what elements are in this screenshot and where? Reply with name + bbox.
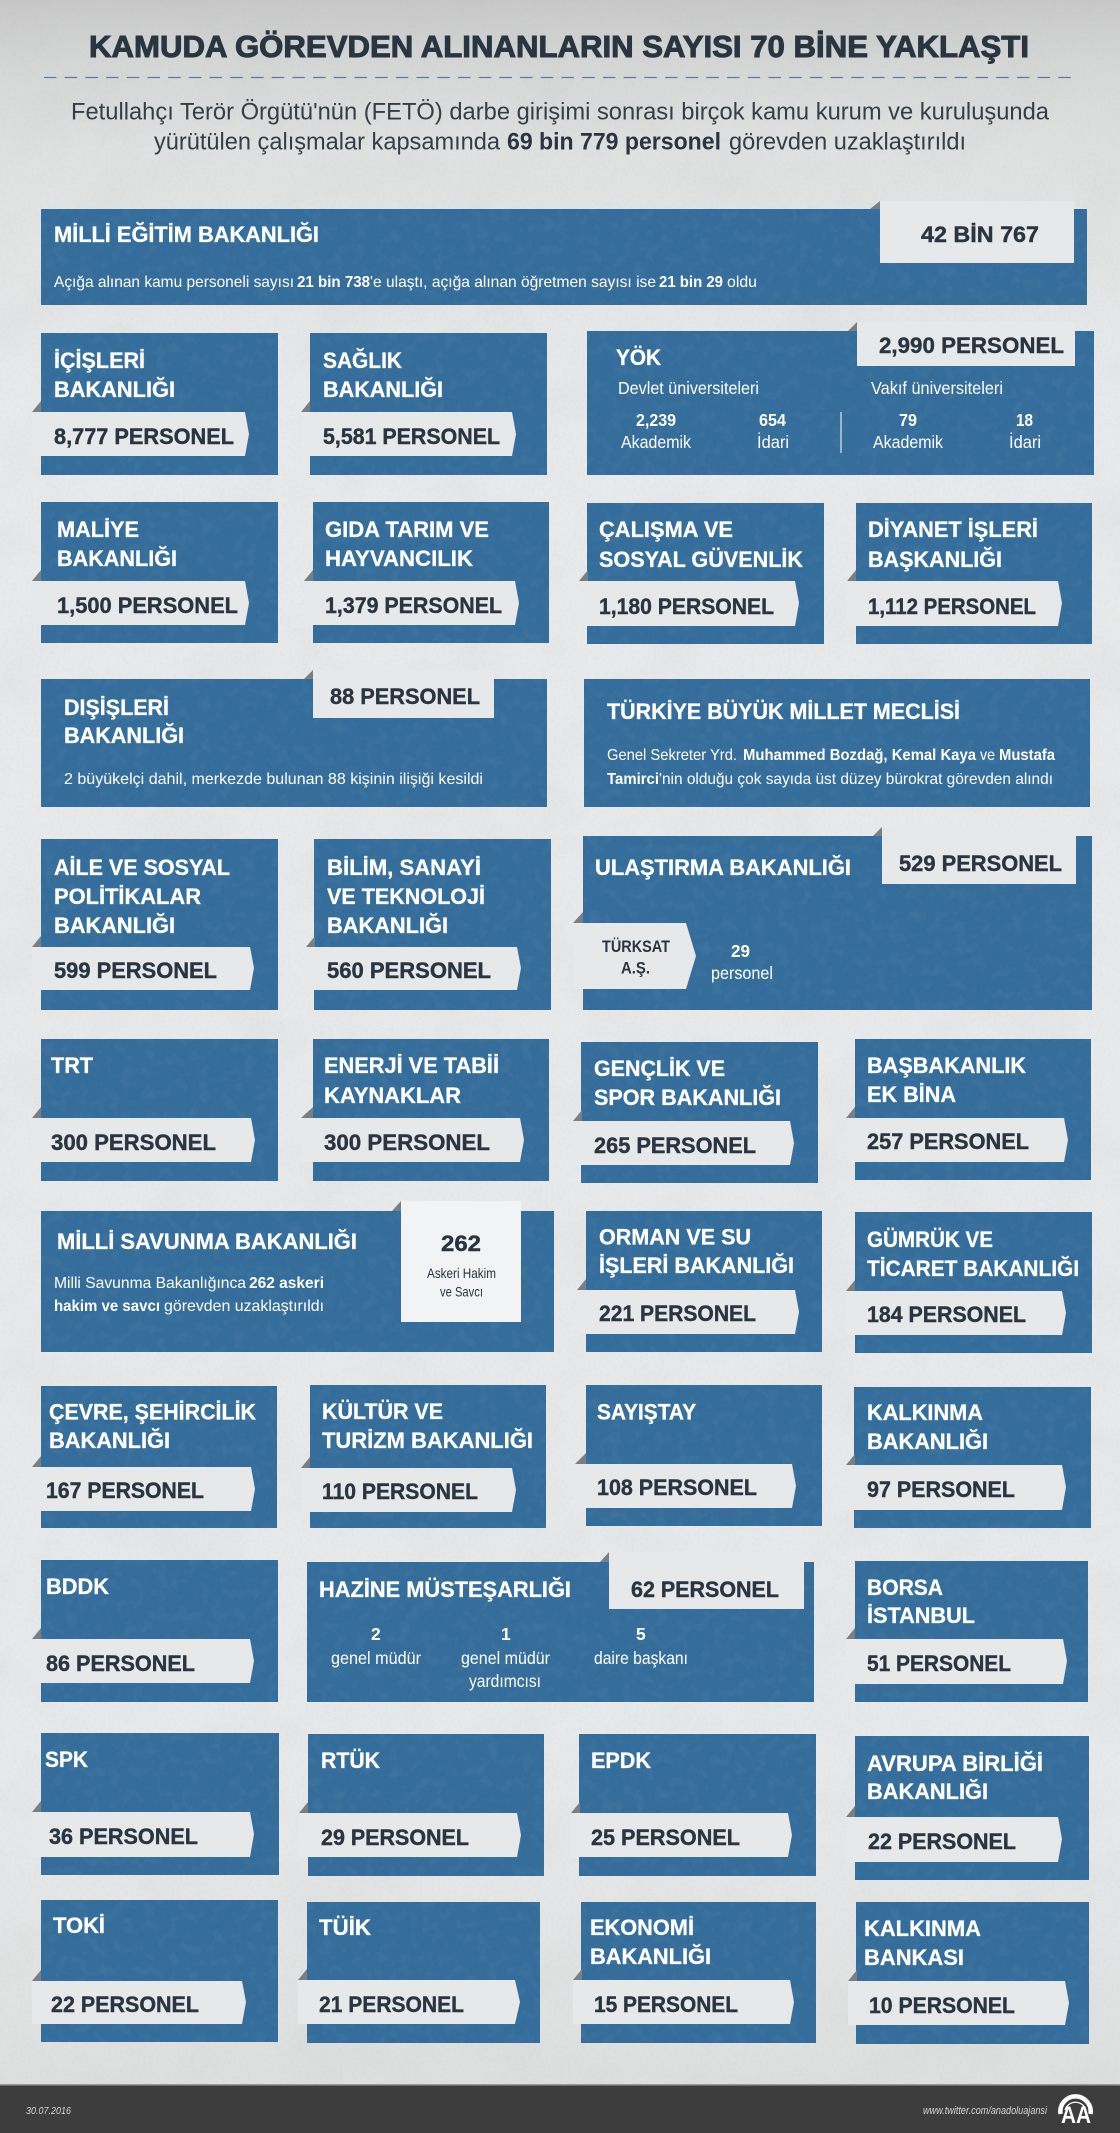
ribbon: 88 personel bbox=[304, 670, 494, 718]
ribbon: 300 personel: 300 PERSONEL bbox=[324, 1130, 490, 1155]
panel: Diyanet İşleri Başkanlığı bbox=[847, 503, 1092, 644]
heading: Gıda Tarım bbox=[325, 517, 489, 571]
ribbon: 97 personel bbox=[846, 1454, 1066, 1510]
ribbon: 300 personel bbox=[301, 1107, 524, 1162]
card: 262 askeri hakim ve savcı bbox=[392, 1201, 521, 1322]
panel: Enerji ve Tabii Kaynaklar bbox=[301, 1039, 549, 1181]
ribbon: 300 personel: 300 PERSONEL bbox=[51, 1130, 216, 1155]
state universities: 2,239 bbox=[636, 410, 676, 430]
panel: Kalkınma Bakanlığı bbox=[846, 1387, 1091, 1528]
ribbon: 62 personel: 62 PERSONEL bbox=[631, 1577, 779, 1602]
heading: TBMM: TÜRKİYE BÜYÜK MİLLET MECLİSİ bbox=[607, 699, 960, 724]
heading: YÖK: YÖK bbox=[616, 345, 661, 370]
panel: Aile ve Sosyal Politikalar Bakanlığı bbox=[32, 839, 278, 1010]
ribbon: 1,500 personel: 1,500 PERSONEL bbox=[57, 593, 238, 618]
ribbon: 257 personel bbox=[846, 1107, 1068, 1162]
footer bbox=[0, 2084, 1120, 2133]
ribbon: 8,777 personel: 8,777 PERSONEL bbox=[54, 424, 234, 449]
ribbon: 29 personel bbox=[299, 1802, 521, 1857]
ribbon: 51 personel bbox=[846, 1628, 1067, 1684]
description: 21 bin 738 bbox=[297, 274, 370, 291]
date: 30.07.2016 bbox=[26, 2105, 71, 2117]
description: oldu bbox=[727, 274, 757, 291]
ribbon: 110 personel: 110 PERSONEL bbox=[322, 1479, 478, 1504]
description: ve bbox=[980, 747, 995, 764]
heading: Maliye: BAKANLIĞI bbox=[57, 546, 177, 571]
ribbon: 29 personel: 29 PERSONEL bbox=[321, 1825, 469, 1850]
figure: 1 genel müdür yardımcısı bbox=[461, 1624, 550, 1691]
figure: 29 personel bbox=[711, 941, 773, 983]
heading: Aile: POLİTİKALAR bbox=[54, 884, 201, 909]
heading: BDDK: BDDK bbox=[46, 1574, 109, 1599]
heading: Bilim: BAKANLIĞI bbox=[327, 913, 448, 938]
ribbon: 25 personel bbox=[571, 1802, 792, 1857]
description: Tamirci bbox=[607, 771, 659, 788]
heading: Milli Eğitim: MİLLİ EĞİTİM BAKANLIĞI bbox=[54, 222, 319, 247]
ribbon: 529 personel bbox=[873, 827, 1076, 884]
heading: EPDK: EPDK bbox=[591, 1748, 651, 1773]
heading: Dışişleri bbox=[64, 695, 184, 748]
heading: Kültür: TURİZM BAKANLIĞI bbox=[322, 1428, 533, 1453]
description: 262 askeri bbox=[249, 1275, 324, 1292]
card: 262 askeri hakim ve savcı: 262 bbox=[441, 1231, 481, 1256]
ribbon: 22 personel: 22 PERSONEL bbox=[51, 1992, 199, 2017]
figure: 5 daire başkanı bbox=[594, 1624, 688, 1668]
figure: 2 genel müdür: 2 bbox=[371, 1624, 381, 1644]
ribbon: 88 personel: 88 PERSONEL bbox=[330, 684, 480, 709]
panel: YÖK bbox=[587, 322, 1094, 475]
ribbon: 2,990 personel bbox=[848, 322, 1075, 366]
heading: Çalışma: SOSYAL GÜVENLİK bbox=[599, 547, 803, 572]
ribbon: 8,777 personel bbox=[32, 401, 249, 456]
ribbon: 599 personel bbox=[32, 936, 254, 990]
ribbon: 108 personel bbox=[575, 1453, 796, 1508]
description: görevden uzaklaştırıldı bbox=[164, 1298, 324, 1315]
title: KAMUDA GÖREVDEN ALINANLARIN SAYISI 70 BİNE YAKLAŞTI bbox=[89, 29, 1029, 64]
heading: TRT: TRT bbox=[51, 1053, 94, 1078]
heading: İçişleri bbox=[54, 348, 175, 402]
heading: Kalkınma Bankası: BANKASI bbox=[864, 1945, 964, 1970]
panel: İçişleri Bakanlığı bbox=[32, 333, 278, 475]
description: Mustafa bbox=[999, 747, 1055, 764]
heading: Avrupa Birliği: AVRUPA BİRLİĞİ bbox=[867, 1751, 1043, 1776]
ribbon: Türksat A.Ş. bbox=[573, 912, 696, 989]
panel: Ulaştırma Bakanlığı bbox=[573, 827, 1092, 1010]
heading: Dışişleri: BAKANLIĞI bbox=[64, 723, 184, 748]
panel: Gıda Tarım ve Hayvancılık bbox=[304, 502, 549, 643]
heading: Aile bbox=[54, 855, 230, 938]
description bbox=[54, 274, 757, 291]
heading: Çevre: ÇEVRE, ŞEHİRCİLİK bbox=[49, 1400, 256, 1424]
ribbon: 221 personel: 221 PERSONEL bbox=[599, 1301, 756, 1326]
heading: Kalkınma Bankası bbox=[864, 1916, 981, 1970]
heading: Borsa: İSTANBUL bbox=[867, 1603, 975, 1628]
panel: Kültür ve Turizm Bakanlığı bbox=[301, 1385, 546, 1528]
figure: 5 daire başkanı: daire başkanı bbox=[594, 1648, 688, 1668]
heading: Sağlık: SAĞLIK bbox=[323, 348, 402, 373]
ribbon: 108 personel: 108 PERSONEL bbox=[597, 1475, 757, 1500]
heading: TÜİK: TÜİK bbox=[319, 1915, 371, 1940]
foundation universities bbox=[871, 378, 1041, 452]
source url: www.twitter.com/anadoluajansi bbox=[923, 2105, 1047, 2117]
foundation universities: Akademik bbox=[873, 432, 943, 452]
description: Açığa alınan kamu personeli sayısı bbox=[54, 274, 294, 291]
heading: Maliye: MALİYE bbox=[57, 517, 139, 542]
heading: Kalkınma: BAKANLIĞI bbox=[867, 1429, 988, 1454]
panel: EPDK bbox=[571, 1734, 816, 1876]
panel: SPK bbox=[32, 1733, 279, 1875]
heading: Gençlik: SPOR BAKANLIĞI bbox=[594, 1085, 781, 1110]
ribbon: 1,112 personel: 1,112 PERSONEL bbox=[868, 594, 1036, 619]
panel: Türkiye Büyük Millet Meclisi bbox=[584, 679, 1090, 807]
subtitle: Fetullahçı Terör Örgütü'nün (FETÖ) darbe girişimi sonrası birçok kamu kurum ve kuruluşunda bbox=[71, 98, 1050, 126]
description: Milli Savunma Bakanlığınca bbox=[54, 1275, 246, 1292]
ribbon: 10 personel: 10 PERSONEL bbox=[869, 1993, 1015, 2018]
ribbon: 265 personel: 265 PERSONEL bbox=[594, 1133, 756, 1158]
ribbon: 36 personel bbox=[32, 1801, 254, 1857]
figure: 29 personel: 29 bbox=[731, 941, 750, 961]
ribbon: 21 personel: 21 PERSONEL bbox=[319, 1992, 464, 2017]
state universities: Akademik bbox=[621, 432, 691, 452]
heading: Orman: İŞLERİ BAKANLIĞI bbox=[599, 1253, 794, 1278]
ribbon: 5,581 personel: 5,581 PERSONEL bbox=[323, 424, 500, 449]
heading: Diyanet: BAŞKANLIĞI bbox=[868, 547, 1002, 572]
panel: Gençlik ve Spor Bakanlığı bbox=[573, 1042, 818, 1183]
heading: Gençlik bbox=[594, 1056, 781, 1110]
ribbon: 51 personel: 51 PERSONEL bbox=[867, 1651, 1011, 1676]
figure: 1 genel müdür yardımcısı: 1 bbox=[501, 1624, 511, 1644]
heading: Gıda Tarım: HAYVANCILIK bbox=[325, 546, 473, 571]
ribbon: 86 personel: 86 PERSONEL bbox=[46, 1651, 195, 1676]
ribbon: 560 personel bbox=[306, 936, 521, 990]
heading: Başbakanlık bbox=[867, 1053, 1026, 1107]
description: 21 bin 29 bbox=[659, 274, 723, 291]
ribbon: 15 personel: 15 PERSONEL bbox=[594, 1992, 738, 2017]
description bbox=[54, 1275, 324, 1315]
heading: Kültür bbox=[322, 1399, 533, 1453]
heading: Ekonomi bbox=[590, 1915, 711, 1969]
description: 'e ulaştı, açığa alınan öğretmen sayısı ise bbox=[370, 274, 656, 291]
figure: 1 genel müdür yardımcısı: yardımcısı bbox=[469, 1671, 541, 1691]
ribbon: 110 personel bbox=[301, 1457, 516, 1512]
description: 2 büyükelçi dahil, merkezde bulunan 88 kişinin ilişiği kesildi bbox=[64, 771, 483, 788]
heading: Maliye bbox=[57, 517, 177, 571]
heading: Hazine: HAZİNE MÜSTEŞARLIĞI bbox=[319, 1577, 571, 1602]
heading: İçişleri: BAKANLIĞI bbox=[54, 377, 175, 402]
heading: Sağlık bbox=[323, 348, 443, 402]
ribbon: 42 bin 767: 42 BİN 767 bbox=[921, 222, 1039, 247]
heading: Orman bbox=[599, 1224, 794, 1278]
heading: Başbakanlık: EK BİNA bbox=[867, 1082, 956, 1107]
icon: AA logo: AA bbox=[1061, 2102, 1091, 2129]
heading: Borsa bbox=[867, 1575, 975, 1628]
ribbon: 167 personel bbox=[32, 1456, 255, 1511]
figure: 2 genel müdür bbox=[331, 1624, 421, 1668]
panel: Kalkınma Bankası bbox=[848, 1902, 1089, 2044]
panel: Maliye Bakanlığı bbox=[32, 502, 278, 643]
ribbon: 184 personel bbox=[846, 1280, 1066, 1335]
heading: Çalışma: ÇALIŞMA VE bbox=[599, 517, 733, 542]
heading: Bilim: BİLİM, SANAYİ bbox=[327, 855, 481, 880]
ribbon: 167 personel: 167 PERSONEL bbox=[46, 1478, 204, 1503]
ribbon: 1,112 personel bbox=[847, 570, 1062, 626]
heading: Çalışma bbox=[599, 517, 803, 572]
heading: Aile: AİLE VE SOSYAL bbox=[54, 855, 230, 880]
ribbon: Türksat A.Ş.: TÜRKSAT bbox=[602, 937, 671, 956]
ribbon: 2,990 personel: 2,990 PERSONEL bbox=[879, 333, 1064, 358]
ribbon: 5,581 personel bbox=[301, 401, 516, 456]
heading: Enerji: KAYNAKLAR bbox=[324, 1083, 461, 1108]
panel: TOKİ bbox=[32, 1900, 278, 2042]
description: hakim ve savcı bbox=[54, 1298, 160, 1315]
panel: Hazine Müsteşarlığı bbox=[307, 1552, 814, 1702]
figure: 2 genel müdür: genel müdür bbox=[331, 1648, 421, 1668]
panel: Milli Savunma Bakanlığı bbox=[41, 1201, 554, 1352]
ribbon: 265 personel bbox=[573, 1110, 794, 1165]
foundation universities: Vakıf üniversiteleri bbox=[871, 378, 1003, 398]
heading: Diyanet bbox=[868, 517, 1038, 572]
panel: TRT bbox=[32, 1039, 278, 1181]
panel: BDDK bbox=[32, 1560, 278, 1702]
panel: Milli Eğitim Bakanlığı bbox=[41, 201, 1087, 305]
ribbon: 22 personel bbox=[32, 1970, 246, 2024]
ribbon: 257 personel: 257 PERSONEL bbox=[867, 1129, 1029, 1154]
heading: Avrupa Birliği: BAKANLIĞI bbox=[867, 1779, 988, 1804]
panel: Dışişleri Bakanlığı bbox=[41, 670, 547, 807]
ribbon: 1,180 personel bbox=[579, 570, 799, 626]
heading: Çevre bbox=[49, 1400, 256, 1453]
heading: Gıda Tarım: GIDA TARIM VE bbox=[325, 517, 489, 542]
heading: Diyanet: DİYANET İŞLERİ bbox=[868, 517, 1038, 542]
panel: Başbakanlık Ek Bina bbox=[846, 1039, 1091, 1180]
foundation universities: 79 bbox=[899, 410, 917, 430]
ribbon: 22 personel: 22 PERSONEL bbox=[868, 1829, 1016, 1854]
figure: 29 personel: personel bbox=[711, 963, 773, 983]
heading: Sağlık: BAKANLIĞI bbox=[323, 377, 443, 402]
heading: Sayıştay: SAYIŞTAY bbox=[597, 1400, 696, 1424]
panel: Bilim, Sanayi ve Teknoloji Bakanlığı bbox=[306, 839, 551, 1010]
subtitle: 69 bin 779 personel bbox=[507, 128, 721, 156]
panel: TÜİK bbox=[298, 1902, 540, 2043]
subtitle: yürütülen çalışmalar kapsamında bbox=[154, 128, 501, 156]
heading: Enerji bbox=[324, 1053, 499, 1108]
ribbon: 300 personel bbox=[32, 1107, 255, 1162]
heading: Gümrük: TİCARET BAKANLIĞI bbox=[867, 1256, 1079, 1281]
panel: Çevre, Şehircilik Bakanlığı bbox=[32, 1386, 277, 1528]
ribbon: 36 personel: 36 PERSONEL bbox=[49, 1824, 198, 1849]
description: Muhammed Bozdağ, Kemal Kaya bbox=[743, 747, 976, 764]
heading: İçişleri: İÇİŞLERİ bbox=[54, 348, 145, 373]
heading: TOKİ: TOKİ bbox=[53, 1913, 105, 1938]
heading: Başbakanlık: BAŞBAKANLIK bbox=[867, 1053, 1026, 1078]
description bbox=[607, 747, 1055, 788]
panel: Gümrük ve Ticaret Bakanlığı bbox=[846, 1212, 1092, 1353]
heading: Gümrük: GÜMRÜK VE bbox=[867, 1227, 993, 1252]
heading: Kalkınma bbox=[867, 1400, 988, 1454]
heading: Çevre: BAKANLIĞI bbox=[49, 1428, 170, 1453]
heading: Enerji: ENERJİ VE TABİİ bbox=[324, 1053, 499, 1078]
heading: Gençlik: GENÇLİK VE bbox=[594, 1056, 725, 1081]
figure: 1 genel müdür yardımcısı: genel müdür bbox=[461, 1648, 550, 1668]
figure: 5 daire başkanı: 5 bbox=[636, 1624, 646, 1644]
ribbon: 184 personel: 184 PERSONEL bbox=[867, 1302, 1026, 1327]
heading: Ekonomi: BAKANLIĞI bbox=[590, 1944, 711, 1969]
description: Genel Sekreter Yrd. bbox=[607, 747, 737, 764]
card: 262 askeri hakim ve savcı: ve Savcı bbox=[440, 1284, 483, 1300]
ribbon: 42 bin 767 bbox=[870, 201, 1074, 263]
description: 'nin olduğu çok sayıda üst düzey bürokrat görevden alındı bbox=[659, 771, 1053, 788]
state universities: Devlet üniversiteleri bbox=[618, 378, 759, 398]
ribbon: Türksat A.Ş.: A.Ş. bbox=[621, 958, 650, 978]
subtitle: görevden uzaklaştırıldı bbox=[729, 128, 966, 156]
panel: Ekonomi Bakanlığı bbox=[573, 1902, 816, 2043]
ribbon: 1,379 personel: 1,379 PERSONEL bbox=[325, 593, 502, 618]
heading: Ulaştırma: ULAŞTIRMA BAKANLIĞI bbox=[595, 855, 851, 880]
ribbon: 529 personel: 529 PERSONEL bbox=[899, 851, 1062, 876]
ribbon: 221 personel bbox=[577, 1279, 799, 1334]
ribbon: 21 personel bbox=[298, 1969, 520, 2024]
state universities bbox=[618, 378, 789, 452]
subtitle bbox=[71, 98, 1050, 156]
foundation universities: 18 bbox=[1016, 410, 1033, 430]
ribbon: 22 personel bbox=[846, 1806, 1062, 1862]
ribbon: 86 personel bbox=[32, 1628, 254, 1683]
ribbon: 1,180 personel: 1,180 PERSONEL bbox=[599, 594, 774, 619]
heading: Milli Savunma: MİLLİ SAVUNMA BAKANLIĞI bbox=[57, 1229, 357, 1254]
heading: Kalkınma: KALKINMA bbox=[867, 1400, 983, 1425]
panel: Sayıştay bbox=[575, 1385, 822, 1526]
foundation universities: İdari bbox=[1009, 432, 1041, 452]
heading: Bilim: VE TEKNOLOJİ bbox=[327, 884, 485, 909]
heading: Aile: BAKANLIĞI bbox=[54, 913, 175, 938]
panel: Avrupa Birliği Bakanlığı bbox=[846, 1736, 1089, 1880]
heading: Dışişleri: DIŞİŞLERİ bbox=[64, 695, 169, 720]
heading: Ekonomi: EKONOMİ bbox=[590, 1915, 694, 1940]
heading: Kalkınma Bankası: KALKINMA bbox=[864, 1916, 981, 1941]
ribbon: 10 personel bbox=[848, 1970, 1069, 2025]
ribbon: 25 personel: 25 PERSONEL bbox=[591, 1825, 740, 1850]
panel: RTÜK bbox=[299, 1734, 544, 1876]
ribbon: 1,379 personel bbox=[304, 570, 519, 625]
heading: SPK: SPK bbox=[45, 1747, 88, 1772]
state universities: İdari bbox=[757, 432, 789, 452]
panel: Çalışma ve Sosyal Güvenlik bbox=[579, 503, 824, 644]
ribbon: 560 personel: 560 PERSONEL bbox=[327, 958, 491, 983]
ribbon: 97 personel: 97 PERSONEL bbox=[867, 1477, 1015, 1502]
heading: Orman: ORMAN VE SU bbox=[599, 1224, 751, 1250]
card: 262 askeri hakim ve savcı: Askeri Hakim bbox=[427, 1265, 496, 1281]
panel: Borsa İstanbul bbox=[846, 1561, 1088, 1702]
heading: Avrupa Birliği bbox=[867, 1751, 1043, 1804]
heading: Gümrük bbox=[867, 1227, 1079, 1281]
heading: Borsa: BORSA bbox=[867, 1575, 943, 1600]
heading: Kültür: KÜLTÜR VE bbox=[322, 1399, 443, 1424]
state universities: 654 bbox=[759, 410, 786, 430]
panel: Orman ve Su İşleri Bakanlığı bbox=[577, 1211, 822, 1352]
ribbon: 1,500 personel bbox=[32, 570, 249, 625]
heading: RTÜK: RTÜK bbox=[321, 1748, 380, 1773]
ribbon: 62 personel bbox=[600, 1552, 804, 1609]
ribbon: 15 personel bbox=[573, 1969, 794, 2024]
panel: Sağlık Bakanlığı bbox=[301, 333, 547, 475]
heading: Bilim bbox=[327, 855, 485, 938]
ribbon: 599 personel: 599 PERSONEL bbox=[54, 958, 217, 983]
